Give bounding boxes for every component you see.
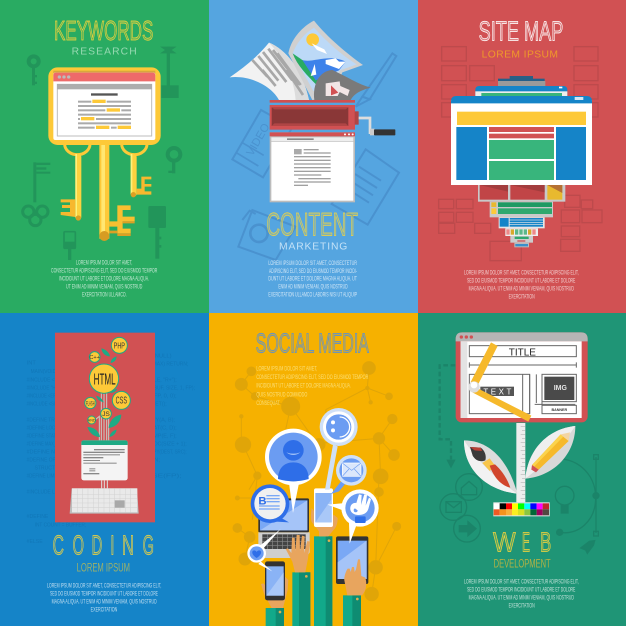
title: CODING: D	[92, 530, 102, 561]
ghost code text: #DEFINE MAX_LEN	[27, 441, 64, 447]
subtitle: RESEARCH: RESEARCH	[72, 47, 137, 58]
bubble: JS: JS	[102, 411, 110, 418]
ghost network	[233, 362, 401, 601]
key trio illustration	[48, 67, 161, 241]
code tree illustration	[70, 337, 139, 514]
red poster	[55, 333, 155, 522]
body text	[464, 269, 579, 301]
body text	[268, 260, 357, 299]
key head window	[48, 67, 161, 145]
title: SOCIAL MEDIA: SOCIAL MEDIA	[256, 327, 369, 358]
bubble: JS	[101, 408, 111, 419]
right key	[122, 144, 151, 197]
bubble: CSS	[112, 391, 130, 409]
ghost icons: VIDEO	[245, 121, 273, 158]
body text: LOREM IPSUM DOLOR SIT AMET,	[76, 259, 132, 266]
wireframe outlines	[469, 346, 576, 414]
grinder machine	[270, 100, 395, 135]
body text	[256, 365, 368, 407]
ghost code text: STRCPY(A, B);	[137, 417, 175, 423]
title: WEB: W	[493, 527, 516, 558]
body text: EXERCITATION ULLAMCO.	[82, 291, 127, 298]
label: TITLE: TITLE	[509, 347, 536, 358]
bubble: HTML	[89, 364, 119, 393]
ghost code text: FOPEN(FILE, "R+");	[130, 377, 177, 383]
title: CODING	[53, 530, 154, 561]
bubble: FLASH	[85, 397, 96, 409]
body text: QUIS NOSTRUD COMMODO	[256, 391, 307, 398]
panel: coding	[0, 313, 209, 626]
ghost code text: MEMCPY(DEST, SRC);	[140, 449, 187, 455]
bubble: person	[265, 429, 322, 513]
ghost code text: MAIN(VOID) { PRINTF;	[31, 369, 81, 375]
ghost code text: #DEFINE STATE_BUF_SIZE	[27, 433, 82, 439]
ghost code text: IF (X == NULL)	[132, 353, 172, 359]
body text: INCIDIDUNT UT LABORE ET DOLORE MAGNA ALIQUA.	[256, 383, 351, 390]
body text	[51, 259, 157, 298]
ghost code text: #DEFINE LIMIT	[27, 474, 59, 480]
main sitemap window	[451, 96, 592, 185]
bubble: C++	[89, 352, 101, 362]
central key	[99, 145, 135, 241]
subtitle: MARKETING: MARKETING	[279, 241, 347, 252]
title: WEB	[493, 527, 551, 558]
ruler stem	[516, 423, 525, 502]
bubble: heart	[247, 529, 281, 571]
ghost code text: #INCLUDE "H"	[27, 385, 57, 391]
ghost code text: ELSE	[130, 369, 145, 375]
ghost code text: }	[135, 481, 142, 487]
ghost code text: #DEFINE TRUE = FALSE;	[27, 417, 84, 423]
ghost code text: #INCLUDE <ERRNO.H>	[27, 393, 72, 399]
panel: web development	[418, 313, 626, 626]
ghost code text: #DEFINE N	[27, 449, 55, 455]
ghost code text: STRCMP(E, F);	[138, 433, 177, 439]
title: CODING: I	[110, 530, 114, 561]
ghost code text: PRINTF;	[132, 409, 152, 415]
laptop	[258, 498, 310, 558]
ghost code text: MEMSET();	[140, 401, 167, 407]
panel: site map	[418, 0, 626, 313]
wireframe window	[456, 332, 588, 422]
body text: EXERCITATION	[509, 602, 535, 609]
body text: EXERCITATION	[91, 606, 117, 613]
ghost code text: MALLOC(SIZE + 1);	[140, 441, 187, 447]
video sheet	[314, 70, 371, 100]
tablet	[336, 536, 368, 584]
body text: CONSECTETUR ADIPISCING ELIT, SED DO EIUSMOD TEMPOR	[51, 267, 157, 274]
ghost code text: INT	[27, 361, 36, 367]
ghost code text: INT COUNT = BUFFER;	[35, 522, 87, 528]
ghost icons	[232, 53, 399, 260]
left key	[61, 144, 90, 221]
body text: INCIDIDUNT UT LABORE ET DOLORE MAGNA ALIQUA.	[59, 275, 149, 282]
ghost code text: #DEFINE OFFSET_SIZE	[27, 457, 82, 463]
right arm and hand	[343, 559, 366, 626]
left leaf with brush	[464, 440, 517, 494]
ghost code text: #INCLUDE <SIGNAL.H>	[27, 401, 74, 407]
subtitle: LOREM IPSUM: LOREM IPSUM	[77, 560, 130, 574]
body text: LOREM IPSUM DOLOR SIT AMET, CONSECTETUR ADIPISCING ELIT,	[47, 582, 161, 589]
bubble: C++: C++	[89, 355, 101, 361]
bubble: ok hand	[327, 489, 379, 544]
bubble: mail	[331, 455, 367, 494]
bubble: blog: B	[258, 495, 267, 507]
ghost sitemap boxes	[439, 47, 602, 261]
body text: SED DO EIUSMOD TEMPOR INCIDIDUNT UT LABORE ET DOLORE	[50, 591, 158, 598]
left arm and hand	[286, 535, 310, 626]
title: CODING: N	[122, 530, 134, 561]
bubble: PHP: PHP	[114, 340, 125, 350]
ghost code text: #INCLUDE LOOP.H	[27, 490, 70, 496]
bubble: PHP	[111, 337, 127, 353]
ghost code text: #ELSE	[27, 539, 43, 545]
label: IMG: IMG	[554, 385, 567, 392]
bubble: HTML: HTML	[94, 371, 116, 388]
bubble: CSS: CSS	[116, 396, 127, 407]
photo sheet	[288, 21, 363, 100]
browser window	[270, 132, 355, 202]
body text: CONSECTETUR ADIPISCING ELIT, SED DO EIUSMOD TEMPOR	[256, 374, 368, 381]
subtitle: LOREM IPSUM: LOREM IPSUM	[482, 49, 558, 60]
panel: social media	[209, 313, 418, 626]
ghost code text: STRCAT(C, D);	[138, 425, 177, 431]
ghost code text	[27, 353, 195, 545]
keyboard	[70, 488, 139, 514]
ghost code text: CLOSE(FP);	[135, 473, 182, 479]
body text: EXERCITATION	[509, 294, 535, 301]
ghost code text: STRUCT BUF_SIZE;	[35, 466, 82, 472]
ghost code text: #INCLUDE <STDIO.H>	[27, 377, 77, 383]
body text: CONSEQUAT.	[256, 400, 280, 407]
folding ruler	[468, 342, 531, 422]
ghost code text: FI	[138, 465, 147, 471]
bubble: AND: AND	[88, 418, 96, 422]
panel: content marketing	[209, 0, 418, 313]
body text: EXERCITATION ULLAMCO LABORIS NISI UT ALIQUIP	[268, 292, 357, 299]
centre arm with phone	[311, 488, 338, 626]
body text: LOREM IPSUM DOLOR SIT AMET, CONSECTETUR	[268, 260, 357, 267]
cables	[102, 480, 107, 488]
bubble: blog	[251, 484, 289, 523]
ghost code text: SEEK(FP, 0, 0);	[137, 393, 177, 399]
body text: MAGNA ALIQUA. UT ENIM AD MINIM VENIAM, QUIS NOSTRUD	[52, 598, 157, 605]
colour palette	[493, 502, 550, 516]
bubble: smiley	[320, 408, 358, 490]
label: BANNER: BANNER	[552, 408, 568, 412]
body text: UT ENIM AD MINIM VENIAM, QUIS NOSTRUD	[66, 284, 142, 291]
ghost icons	[440, 365, 599, 553]
body text	[47, 582, 161, 613]
label: TEXT: TEXT	[483, 387, 511, 396]
subtitle: DEVELOPMENT: DEVELOPMENT	[494, 557, 551, 571]
pyramid pages below	[478, 185, 565, 247]
small phone arm	[261, 561, 288, 626]
ghost code text: RETURN;	[133, 457, 160, 463]
leaves	[87, 348, 121, 437]
paper sheet	[230, 43, 309, 100]
bubble: AND	[88, 416, 96, 424]
ghost code text: #DEFINE LOCK 0	[27, 425, 62, 431]
stacked pages behind	[475, 76, 567, 97]
title: CODING: G	[143, 530, 154, 561]
ghost key icons	[23, 47, 180, 260]
title: CODING: O	[73, 530, 84, 561]
title: WEB: B	[540, 527, 551, 558]
stems	[93, 380, 109, 440]
title: KEYWORDS: KEYWORDS	[54, 15, 153, 46]
title: CODING: C	[53, 530, 64, 561]
body text: DUNT UT LABORE ET DOLORE MAGNA ALIQUA. UT	[268, 276, 357, 283]
right leaf with pencil	[525, 426, 575, 479]
title: CONTENT: CONTENT	[266, 205, 358, 242]
title: WEB: E	[522, 527, 530, 558]
body text	[464, 578, 579, 609]
ghost code text: IF (Y != MAX) RETURN;	[135, 361, 189, 367]
ghost code text: #DEFINE	[27, 514, 49, 520]
title: SITE MAP: SITE MAP	[479, 16, 563, 47]
ghost code text: FREAD(BUF, SIZE, 1, FP);	[135, 385, 195, 391]
code window	[81, 440, 128, 480]
panel: keywords research	[0, 0, 209, 313]
body text: ENIM AD MINIM VENIAM, QUIS NOSTRUD	[278, 284, 348, 291]
code tree illustration: FLASH	[86, 400, 95, 407]
body text: ADIPISCING ELIT, SED DO EIUSMOD TEMPOR INCIDI-	[269, 268, 357, 275]
body text: LOREM IPSUM DOLOR SIT AMET,	[256, 365, 317, 372]
